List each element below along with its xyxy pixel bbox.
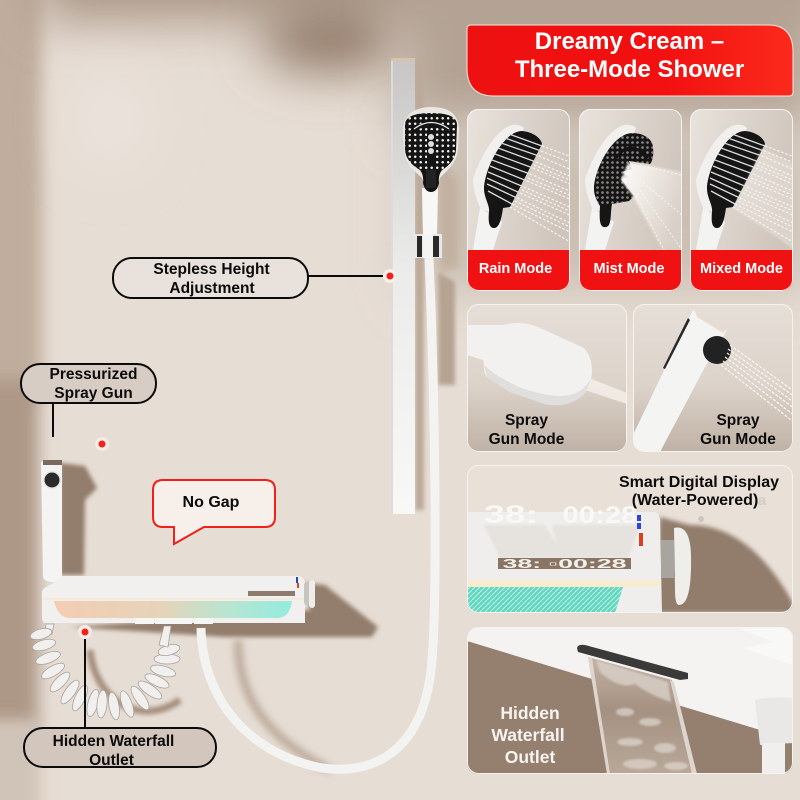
panel: hidden waterfall outlet: Outlet [505, 747, 555, 767]
panel: hidden waterfall outlet: Waterfall [491, 725, 565, 745]
title banner [467, 25, 793, 96]
panel: hidden waterfall outlet: Hidden [500, 703, 560, 723]
panel: smart digital display: Smart Digital Display [619, 474, 779, 491]
panel: spray gun mode left: Gun Mode [489, 431, 565, 448]
panel: smart digital display: 00:28 [562, 502, 638, 529]
callout: pressurized spray gun: Spray Gun [54, 385, 133, 402]
panel: smart digital display: a [758, 492, 767, 509]
sliding rail [391, 58, 415, 514]
panel: hidden waterfall outlet [467, 627, 793, 775]
callout: stepless height adjustment: Adjustment [169, 280, 255, 297]
callout: hidden waterfall outlet: Outlet [89, 752, 134, 769]
panel: rain mode: Rain Mode [479, 261, 552, 277]
panel: mixed mode: Mixed Mode [700, 261, 783, 277]
hand shower head [403, 107, 459, 192]
panel: smart digital display: 38: ▫00:28 [502, 557, 627, 571]
shadows of shelf and hose [60, 60, 458, 770]
panel: smart digital display: (Water-Powered) [632, 492, 758, 509]
panel: spray gun mode right [633, 304, 795, 452]
callout: pressurized spray gun: Pressurized [50, 366, 137, 383]
callout: hidden waterfall outlet: Hidden Waterfall [53, 733, 174, 750]
title banner: Dreamy Cream – [535, 28, 724, 55]
panel: smart digital display: 38: [484, 501, 538, 529]
panel: spray gun mode right: Gun Mode [700, 431, 776, 448]
callout: stepless height adjustment: Stepless Height [153, 261, 270, 278]
red hotspot dot [95, 437, 109, 451]
callout: no gap [153, 480, 275, 544]
white hose [201, 258, 435, 769]
panel: spray gun mode right: Spray [716, 412, 760, 429]
coiled spray hose [29, 624, 181, 721]
callout: stepless height adjustment [113, 258, 397, 298]
panel: mixed mode [690, 109, 795, 291]
panel: rain mode [467, 109, 572, 291]
panel: spray gun mode left [467, 304, 627, 452]
shower bracket [415, 234, 442, 258]
panel: smart digital display [467, 465, 793, 613]
control shelf [42, 576, 315, 624]
spray gun handset [41, 460, 62, 582]
title banner: Three-Mode Shower [515, 56, 744, 83]
callout: no gap: No Gap [183, 494, 240, 511]
callout: hidden waterfall outlet [24, 625, 216, 769]
panel: spray gun mode left: Spray [505, 412, 548, 429]
panel: mist mode: Mist Mode [594, 261, 664, 277]
callout: pressurized spray gun [21, 364, 156, 437]
shower neck [422, 188, 438, 236]
panel: mist mode [579, 109, 682, 291]
